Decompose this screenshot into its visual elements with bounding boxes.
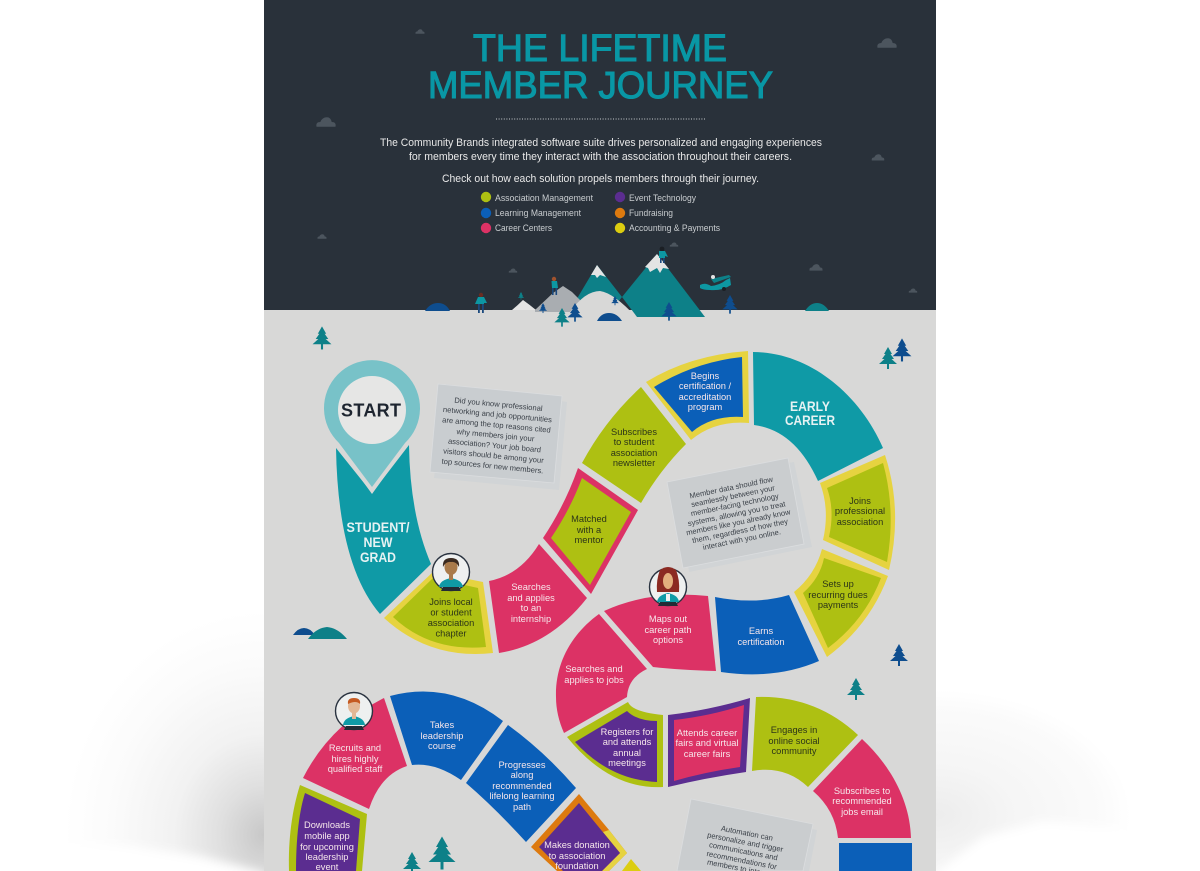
tile: searches and applies to jobs: [556, 614, 647, 733]
tile: attends career fairs: fairs and virtual: [675, 738, 739, 748]
tile: joins local chapter: [384, 572, 493, 654]
tile: makes donation: foundation: [555, 861, 599, 871]
tile: engages online community: [752, 697, 858, 787]
card: member data note: members like you already know: [685, 507, 792, 537]
tile: sets up recurring dues: Sets up: [822, 579, 854, 589]
poster lower paper: [264, 310, 936, 871]
tile: joins professional association: association: [837, 517, 883, 527]
legend: Accounting & Payments: [629, 223, 720, 233]
tile: attends career fairs: Attends career: [677, 728, 737, 738]
start segment: student / new grad: STUDENT/: [346, 520, 410, 535]
tile: downloads mobile app: [289, 785, 367, 871]
tile: subscribes to jobs email: recommended: [832, 796, 892, 806]
legend: Career Centers: [495, 223, 552, 233]
avatar: student: [432, 554, 470, 591]
card: automation note: recommendations for: [706, 849, 778, 871]
tile: sets up recurring dues: recurring dues: [808, 590, 868, 600]
tile: maps out career path: [604, 595, 716, 671]
tile: registers annual meetings: [567, 702, 663, 787]
tile: joins local chapter: or student: [430, 608, 472, 618]
tile: begins certification: Begins: [691, 371, 720, 381]
tile: begins certification: [646, 351, 749, 440]
tile: recruits and hires: hires highly: [331, 754, 379, 764]
tile: matched with mentor: [543, 468, 638, 594]
tile: attends career fairs: career fairs: [684, 749, 731, 759]
tile: cut off blue: [839, 843, 912, 871]
tile: takes leadership course: [390, 692, 503, 780]
intro text: The Community Brands integrated software suite drives personalized and engaging experiences: [380, 137, 822, 149]
card: automation note: Automation can: [720, 824, 774, 843]
tile: progresses learning path: lifelong learning: [489, 791, 555, 801]
tile: matched with mentor: mentor: [575, 535, 603, 545]
start pin: START: [341, 400, 401, 420]
tile: searches internship: and applies: [507, 593, 555, 603]
tile: engages online community: online social: [768, 736, 820, 746]
people climbing: [475, 247, 668, 313]
tile: subscribes to student newsletter: to student: [614, 437, 655, 447]
tile: recruits and hires: [303, 698, 407, 809]
title: [428, 28, 773, 107]
tile: attends career fairs: [668, 698, 750, 787]
tile: progresses learning path: [466, 725, 576, 842]
tile: makes donation: Makes donation: [544, 840, 610, 850]
card: professional networking note: Did you know professional: [454, 396, 543, 413]
card: member data note: interact with you online.: [702, 527, 782, 552]
card: professional networking note: why members join your: [455, 427, 535, 443]
tile: joins professional association: [820, 455, 895, 570]
card: member data note: them, regardless of how they: [691, 517, 789, 545]
tile: registers annual meetings: annual: [613, 748, 641, 758]
card: member data note: Member data should flow: [689, 475, 774, 500]
segment: early career: CAREER: [785, 412, 835, 428]
tile: maps out career path: options: [653, 635, 683, 645]
avatar: early career woman: [650, 567, 686, 606]
start segment: student / new grad: GRAD: [360, 550, 396, 565]
tile: progresses learning path: along: [511, 770, 533, 780]
tile: engages online community: community: [772, 746, 817, 756]
card: member data note: seamlessly between your: [690, 483, 776, 509]
tile: progresses learning path: Progresses: [498, 760, 546, 770]
avatar: manager: [336, 692, 372, 730]
poster drop shadow: [40, 600, 1160, 871]
card: professional networking note: networking and job opportunities: [443, 405, 553, 424]
tile: makes donation: [531, 794, 627, 871]
legend: Association Management: [495, 193, 593, 203]
card: automation note: personalize and trigger: [706, 830, 784, 854]
card: professional networking note: [430, 384, 567, 490]
card: automation note: communications and: [708, 840, 778, 862]
tile: sets up recurring dues: payments: [818, 600, 859, 610]
start segment: student / new grad: [336, 445, 431, 614]
tile: matched with mentor: Matched: [571, 514, 607, 524]
legend: Learning Management: [495, 208, 581, 218]
tile: begins certification: certification /: [679, 381, 732, 391]
card: member data note: systems, allowing you to treat: [687, 499, 787, 528]
tile: joins professional association: professional: [835, 506, 885, 516]
tile: joins local chapter: chapter: [435, 628, 467, 638]
tile: maps out career path: Maps out: [649, 614, 688, 624]
tile: progresses learning path: path: [513, 802, 531, 812]
intro text: for members every time they interact with the association throughout their careers.: [409, 151, 792, 163]
card: professional networking note: top sources for new members.: [441, 457, 544, 475]
tile: joins local chapter: association: [428, 618, 474, 628]
card: member data note: [667, 458, 812, 572]
tile: subscribes to student newsletter: Subscribes: [611, 427, 657, 437]
tile: earns certification: Earns: [749, 626, 773, 636]
card: automation note: [677, 799, 817, 871]
segment: early career: [753, 352, 883, 481]
tile: subscribes to jobs email: Subscribes to: [834, 786, 890, 796]
card: professional networking note: association? Your job board: [448, 437, 541, 454]
tile: takes leadership course: Takes: [430, 720, 454, 730]
tile: downloads mobile app: Downloads: [304, 820, 350, 830]
tile: begins certification: program: [688, 402, 723, 412]
tile: subscribes to student newsletter: association: [611, 448, 657, 458]
tile: searches and applies to jobs: applies to jobs: [564, 675, 624, 685]
tile: joins professional association: Joins: [849, 496, 871, 506]
bushes and trees: [425, 292, 829, 327]
card: professional networking note: visitors should be among your: [443, 446, 545, 465]
tile: engages online community: Engages in: [771, 725, 817, 735]
intro text: [380, 137, 822, 185]
tile: joins local chapter: Joins local: [429, 597, 473, 607]
card: member data note: member-facing technology: [690, 491, 780, 518]
tile: earns certification: certification: [737, 637, 785, 647]
segment: early career: EARLY: [790, 398, 831, 414]
tile: maps out career path: career path: [644, 625, 692, 635]
start pin: [323, 360, 421, 494]
tile: searches internship: to an: [521, 603, 541, 613]
tile: matched with mentor: with a: [576, 525, 602, 535]
tile: subscribes to student newsletter: newsletter: [613, 458, 655, 468]
decorative trees and bushes on board: [293, 326, 911, 871]
tile: registers annual meetings: meetings: [608, 758, 646, 768]
tile: searches internship: [489, 544, 587, 653]
tile: subscribes to student newsletter: [582, 387, 686, 503]
header panel: [264, 0, 936, 310]
clouds: [316, 29, 917, 293]
tile: subscribes to jobs email: [813, 739, 911, 838]
tile: downloads mobile app: for upcoming: [300, 842, 354, 852]
tile: takes leadership course: leadership: [421, 731, 463, 741]
tile: takes leadership course: course: [428, 741, 456, 751]
start segment: student / new grad: NEW: [364, 535, 393, 550]
tile: subscribes to jobs email: jobs email: [840, 807, 883, 817]
tile: makes donation: to association: [549, 851, 605, 861]
title: THE LIFETIME: [473, 28, 727, 70]
tile: earns certification: [715, 595, 819, 674]
tile: cut off yellow: [622, 859, 641, 871]
plane: [700, 275, 731, 291]
tile: searches internship: Searches: [511, 582, 551, 592]
tile: downloads mobile app: mobile app: [304, 831, 350, 841]
tile: searches internship: internship: [511, 614, 551, 624]
tile: registers annual meetings: Registers for: [601, 727, 653, 737]
tile: progresses learning path: recommended: [492, 781, 552, 791]
title: MEMBER JOURNEY: [428, 65, 773, 107]
card: professional networking note: are among the top reasons cited: [442, 415, 551, 435]
tile: begins certification: accreditation: [679, 392, 731, 402]
tile: recruits and hires: qualified staff: [328, 764, 383, 774]
mountain scene: [425, 247, 829, 327]
intro text: Check out how each solution propels members through their journey.: [442, 173, 759, 185]
tile: registers annual meetings: and attends: [603, 737, 652, 747]
legend: Fundraising: [629, 208, 673, 218]
tile: recruits and hires: Recruits and: [329, 743, 381, 753]
tile: searches and applies to jobs: Searches and: [565, 664, 623, 674]
tile: sets up recurring dues: [794, 549, 888, 657]
tile: downloads mobile app: leadership: [306, 852, 348, 862]
legend: Event Technology: [629, 193, 696, 203]
legend: [481, 192, 720, 233]
